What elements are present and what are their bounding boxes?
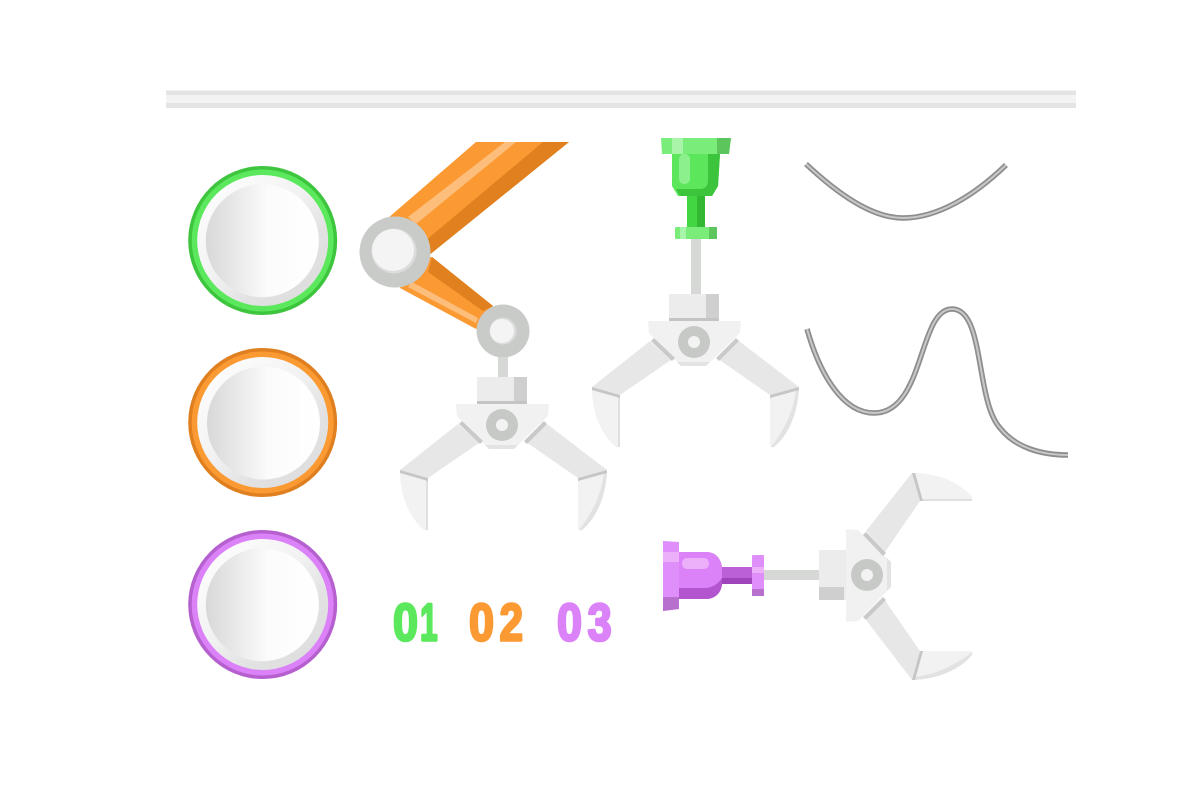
number 01 <box>393 593 438 653</box>
badge ring: green <box>188 166 337 315</box>
claw <box>819 473 972 680</box>
number 03 <box>557 593 612 653</box>
number 02: 2 <box>500 594 523 653</box>
number 01: 0 <box>393 593 418 652</box>
shoulder joint <box>360 216 430 288</box>
connecting rod <box>764 570 820 580</box>
green mount <box>661 138 731 239</box>
green robot arm with claw <box>592 138 799 447</box>
purple robot arm with claw <box>663 473 972 680</box>
elbow joint <box>476 304 530 358</box>
forearm segment <box>400 257 493 329</box>
connecting rod <box>691 239 701 295</box>
claw <box>592 294 799 447</box>
number 02: 0 <box>469 593 494 652</box>
badge ring: orange <box>188 348 337 497</box>
number 02 <box>469 593 523 653</box>
upper arm segment <box>380 142 569 256</box>
orange robot arm with claw <box>360 142 607 530</box>
ceiling rail <box>166 90 1076 108</box>
number 01: 1 <box>420 593 438 653</box>
badge ring: purple <box>188 530 337 679</box>
number 03: 3 <box>588 593 612 653</box>
purple mount <box>663 541 764 611</box>
claw <box>400 357 607 530</box>
cable: wave curve <box>807 309 1068 455</box>
cable: shallow curve <box>806 164 1006 218</box>
number 03: 0 <box>557 593 582 652</box>
